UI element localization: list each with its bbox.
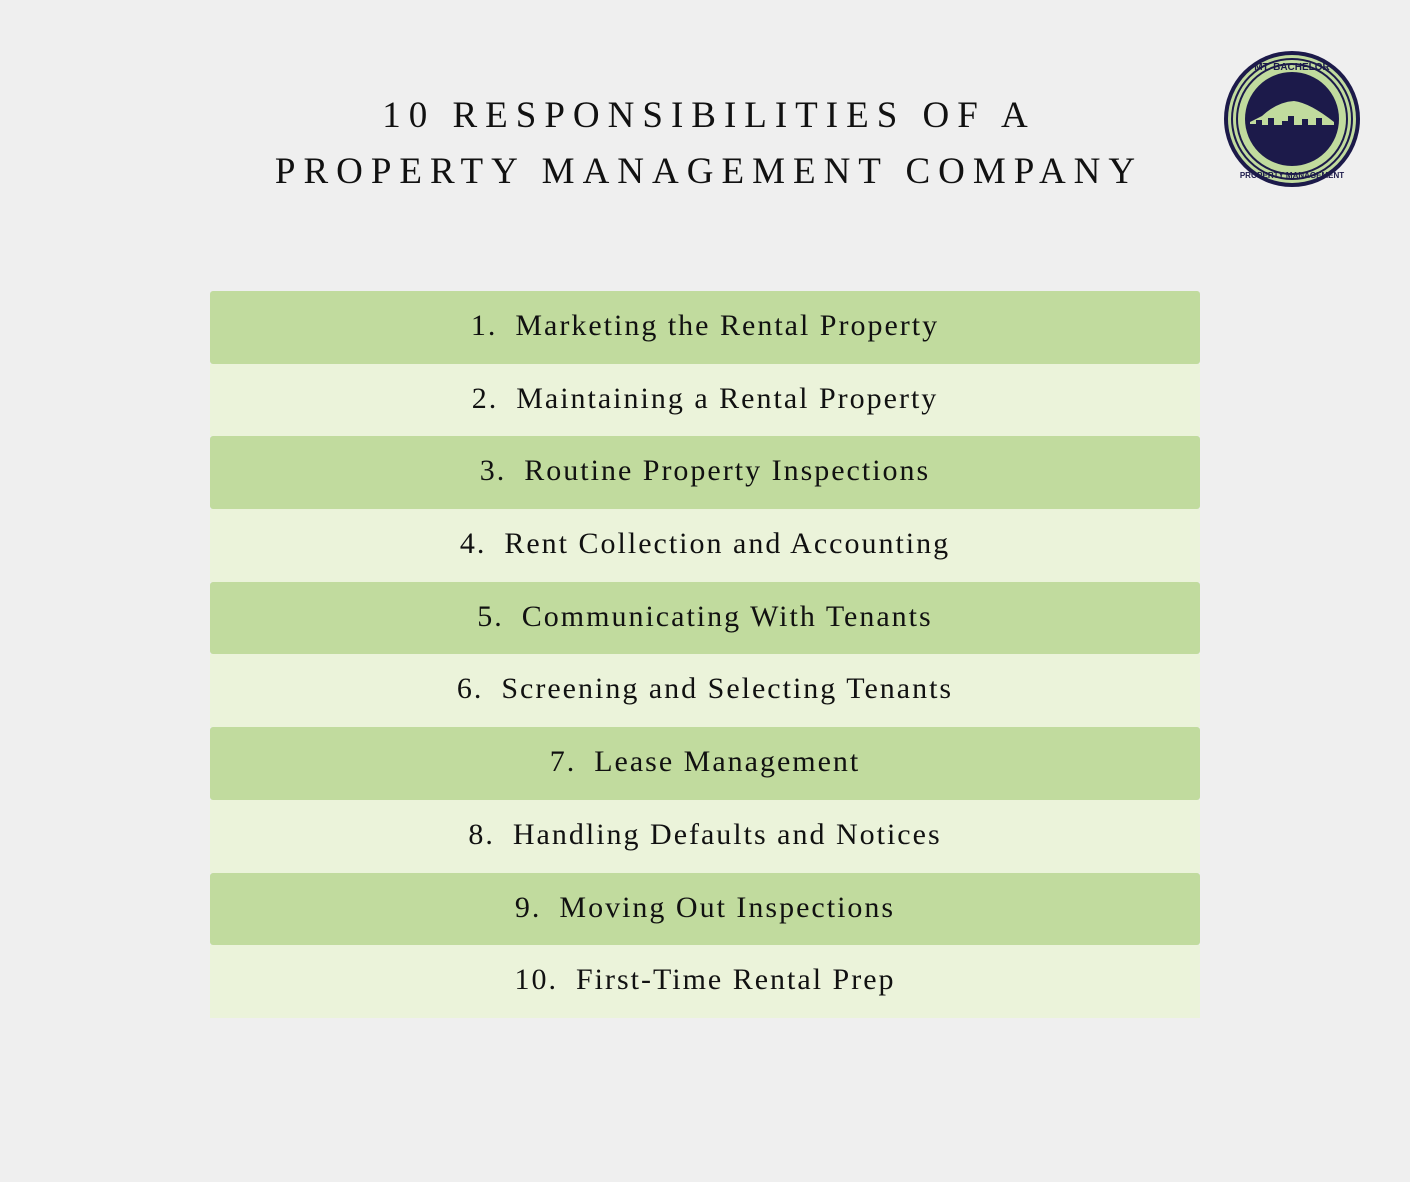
item 8: 8. Handling Defaults and Notices: [468, 818, 942, 851]
item 6: [210, 654, 1200, 727]
item 4: 4. Rent Collection and Accounting: [460, 527, 950, 560]
title: [275, 95, 1143, 192]
title: 10 RESPONSIBILITIES OF A: [382, 95, 1036, 136]
item 2: 2. Maintaining a Rental Property: [472, 382, 938, 415]
item 5: [210, 582, 1200, 654]
logo: MT. BACHELOR: [1254, 62, 1331, 73]
item 7: 7. Lease Management: [550, 745, 860, 778]
title: PROPERTY MANAGEMENT COMPANY: [275, 151, 1143, 192]
item 3: [210, 436, 1200, 509]
item 7: [210, 727, 1200, 800]
item 3: 3. Routine Property Inspections: [480, 454, 930, 487]
item 8: [210, 800, 1200, 872]
list of responsibilities: [210, 291, 1200, 1018]
item 1: 1. Marketing the Rental Property: [471, 309, 939, 342]
item 1: [210, 291, 1200, 364]
logo: [1224, 51, 1360, 187]
item 2: [210, 364, 1200, 436]
item 9: 9. Moving Out Inspections: [515, 890, 895, 924]
item 5: 5. Communicating With Tenants: [477, 600, 933, 633]
item 10: 10. First-Time Rental Prep: [514, 963, 896, 996]
logo: PROPERTY MANAGEMENT: [1240, 171, 1344, 180]
item 9: [210, 872, 1200, 945]
item 6: 6. Screening and Selecting Tenants: [457, 672, 953, 705]
item 4: [210, 509, 1200, 582]
item 10: [210, 945, 1200, 1018]
